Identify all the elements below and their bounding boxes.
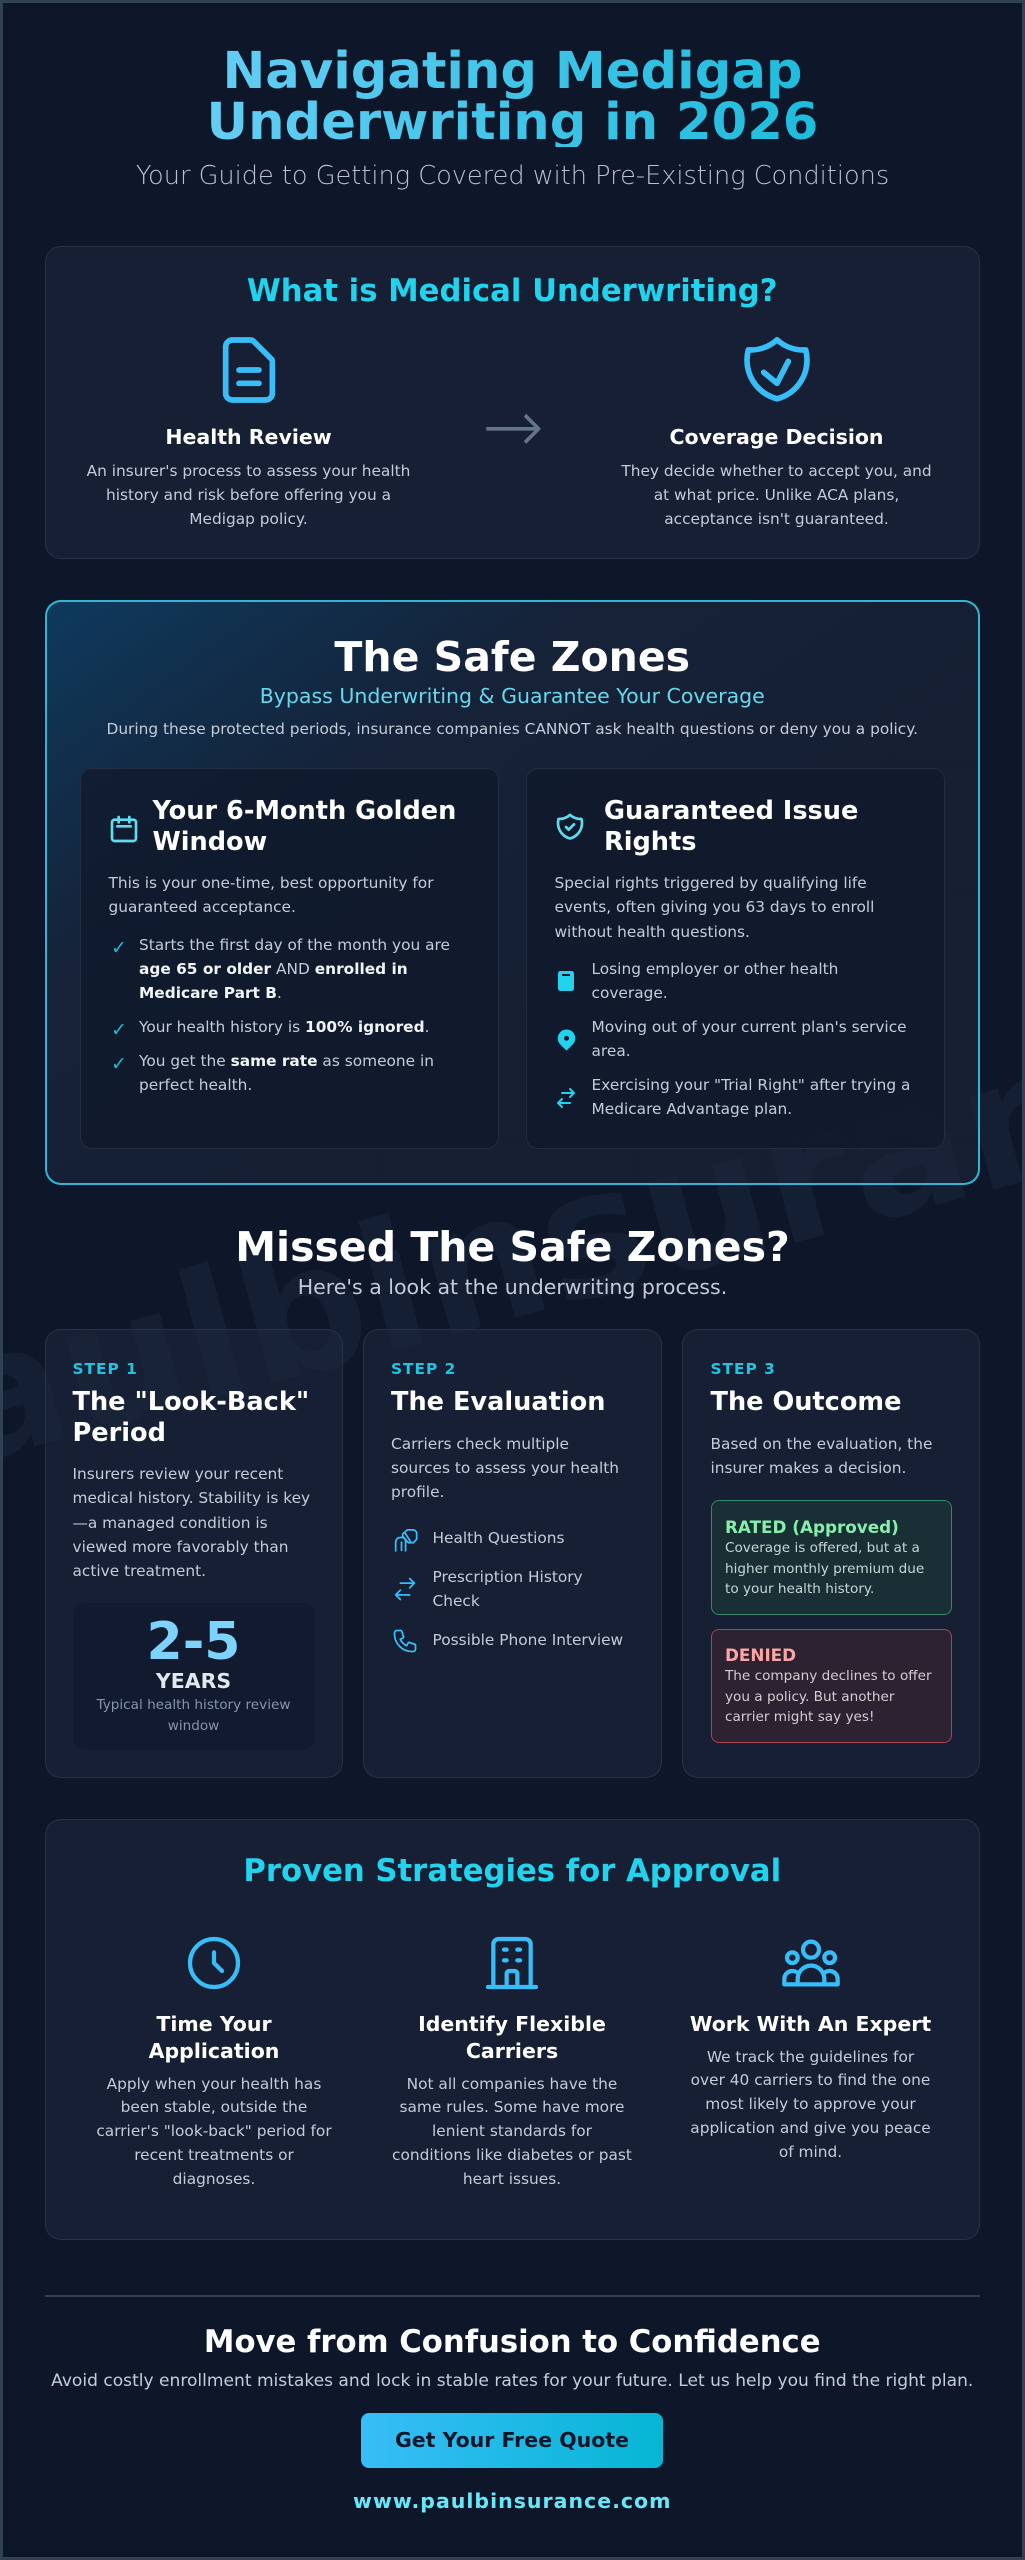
list item: area. bbox=[592, 1042, 631, 1060]
icon: building bbox=[486, 1936, 538, 1990]
text: viewed more favorably than bbox=[72, 1538, 289, 1556]
text: They decide whether to accept you, and bbox=[621, 462, 932, 480]
callout text: you a policy. But another bbox=[725, 1689, 894, 1705]
stat caption bbox=[96, 1697, 290, 1734]
list item: Moving out of your current plan's service bbox=[592, 1018, 907, 1036]
stat caption: window bbox=[168, 1718, 219, 1734]
heading: The Safe Zones bbox=[334, 633, 690, 681]
callout text: The company declines to offer bbox=[725, 1668, 932, 1684]
button bbox=[361, 2413, 663, 2468]
callout text: carrier might say yes! bbox=[725, 1709, 874, 1725]
callout text: higher monthly premium due bbox=[725, 1561, 924, 1577]
callout title: RATED (Approved) bbox=[725, 1517, 899, 1537]
list item 3 bbox=[139, 1052, 434, 1094]
text: same rules. Some have more bbox=[399, 2098, 625, 2116]
icon: card bbox=[558, 971, 574, 991]
list item: Medicare Advantage plan. bbox=[592, 1100, 792, 1118]
callout text bbox=[725, 1540, 924, 1597]
step label: STEP 2 bbox=[391, 1360, 456, 1378]
list item 3: You get the same rate as someone in bbox=[139, 1052, 434, 1070]
heading: The Outcome bbox=[710, 1387, 901, 1417]
note: During these protected periods, insurance companies CANNOT ask health questions or deny you a policy. bbox=[106, 720, 918, 738]
text: Insurers review your recent bbox=[72, 1465, 283, 1483]
heading: Identify Flexible bbox=[418, 2012, 606, 2036]
heading: The "Look-Back" bbox=[72, 1387, 309, 1417]
list item: Check bbox=[432, 1592, 480, 1610]
icon: people bbox=[778, 1931, 842, 1995]
heading bbox=[72, 1387, 309, 1448]
text: been stable, outside the bbox=[121, 2098, 307, 2116]
text bbox=[96, 2074, 332, 2188]
icon: clock bbox=[188, 1936, 240, 1990]
heading: Work With An Expert bbox=[690, 2012, 931, 2036]
heading: health review: Health Review bbox=[165, 425, 332, 449]
text: An insurer's process to assess your health bbox=[87, 462, 410, 480]
card: step 2 bbox=[363, 1329, 662, 1778]
text: We track the guidelines for bbox=[707, 2048, 914, 2066]
check 1: ✓ bbox=[111, 937, 127, 959]
text bbox=[392, 2074, 632, 2188]
list item 2: Your health history is 100% ignored. bbox=[139, 1018, 429, 1036]
text: Not all companies have the bbox=[407, 2074, 617, 2092]
text: —a managed condition is bbox=[72, 1514, 268, 1532]
text: medical history. Stability is key bbox=[72, 1489, 310, 1507]
list item: Prescription History bbox=[432, 1568, 583, 1586]
text: sources to assess your health bbox=[391, 1459, 619, 1477]
heading bbox=[148, 2012, 279, 2062]
text: lenient standards for bbox=[432, 2122, 592, 2140]
heading: Proven Strategies for Approval bbox=[243, 1854, 781, 1888]
text: acceptance isn't guaranteed. bbox=[664, 510, 889, 528]
heading: Application bbox=[149, 2038, 279, 2062]
list item 1: Medicare Part B. bbox=[139, 984, 282, 1002]
heading: Guaranteed Issue bbox=[604, 796, 858, 826]
panel: proven strategies bbox=[44, 1819, 980, 2240]
heading bbox=[604, 796, 858, 857]
column: identify flexible carriers bbox=[392, 1936, 632, 2188]
stat box bbox=[72, 1603, 314, 1750]
column: time your application bbox=[96, 1936, 332, 2188]
text: This is your one-time, best opportunity for bbox=[108, 874, 434, 892]
icon: document bbox=[222, 337, 276, 403]
text bbox=[391, 1435, 619, 1501]
stat unit: YEARS bbox=[156, 1669, 231, 1693]
icon: shield bbox=[556, 814, 584, 840]
text: of mind. bbox=[779, 2143, 842, 2161]
heading: The Evaluation bbox=[391, 1387, 605, 1417]
text bbox=[621, 462, 932, 528]
subheading: Here's a look at the underwriting process. bbox=[298, 1275, 727, 1299]
card: step 1 bbox=[44, 1329, 342, 1778]
icon: swap bbox=[394, 1578, 416, 1600]
list item bbox=[592, 960, 838, 1002]
step label: STEP 3 bbox=[710, 1360, 776, 1378]
text: active treatment. bbox=[72, 1562, 206, 1580]
text: carrier's "look-back" period for bbox=[96, 2122, 332, 2140]
text: events, often giving you 63 days to enroll bbox=[554, 898, 874, 916]
heading: Move from Confusion to Confidence bbox=[204, 2324, 821, 2360]
website link: www.paulbinsurance.com bbox=[353, 2489, 672, 2513]
list item 3: perfect health. bbox=[139, 1076, 252, 1094]
panel: the safe zones bbox=[44, 600, 980, 1185]
column: health review bbox=[86, 337, 410, 528]
text bbox=[676, 2046, 946, 2164]
heading: Period bbox=[72, 1418, 166, 1448]
list item bbox=[592, 1076, 910, 1118]
text bbox=[72, 1465, 310, 1580]
list item: Losing employer or other health bbox=[592, 960, 838, 978]
heading: Window bbox=[152, 827, 267, 857]
text: Special rights triggered by qualifying life bbox=[554, 874, 867, 892]
icon: questions bbox=[394, 1529, 418, 1552]
text: Based on the evaluation, the bbox=[710, 1435, 932, 1453]
text: guaranteed acceptance. bbox=[108, 898, 296, 916]
callout text: to your health history. bbox=[725, 1581, 874, 1597]
footer call to action bbox=[44, 2295, 980, 2520]
arrow: → bbox=[482, 384, 544, 470]
button: Get Your Free Quote bbox=[395, 2428, 629, 2452]
check 2: ✓ bbox=[111, 1019, 127, 1041]
heading: What is Medical Underwriting? bbox=[247, 274, 778, 309]
title bbox=[0, 46, 1025, 147]
callout title: DENIED bbox=[725, 1645, 796, 1665]
card: guaranteed issue bbox=[526, 768, 945, 1149]
callout text: Coverage is offered, but at a bbox=[725, 1540, 920, 1556]
text bbox=[710, 1435, 932, 1477]
stat number: 2-5 bbox=[147, 1612, 240, 1672]
text: heart issues. bbox=[463, 2170, 561, 2188]
text: diagnoses. bbox=[173, 2170, 255, 2188]
icon: phone bbox=[394, 1630, 416, 1652]
list item: Exercising your "Trial Right" after trying a bbox=[592, 1076, 910, 1094]
text: Medigap policy. bbox=[189, 510, 308, 528]
icon: pin bbox=[558, 1030, 576, 1050]
list item bbox=[432, 1568, 583, 1610]
heading: Time Your bbox=[156, 2012, 272, 2036]
text: most likely to approve your bbox=[705, 2095, 916, 2113]
callout: rated bbox=[710, 1500, 952, 1615]
heading: Your 6-Month Golden bbox=[152, 796, 456, 826]
heading: Carriers bbox=[466, 2038, 558, 2062]
text: history and risk before offering you a bbox=[106, 486, 391, 504]
icon: shield check bbox=[744, 336, 810, 402]
text: at what price. Unlike ACA plans, bbox=[654, 486, 899, 504]
list item bbox=[592, 1018, 907, 1060]
text: recent treatments or bbox=[134, 2146, 294, 2164]
subtitle: Your Guide to Getting Covered with Pre-Existing Conditions bbox=[136, 161, 889, 191]
card: step 3 bbox=[682, 1329, 980, 1778]
heading: coverage decision: Coverage Decision bbox=[669, 425, 884, 449]
panel: what is medical underwriting bbox=[44, 246, 980, 559]
text: without health questions. bbox=[554, 923, 750, 941]
heading: missed the safe zones: Missed The Safe Zones? bbox=[235, 1223, 790, 1271]
heading: Rights bbox=[604, 827, 696, 857]
icon: swap bbox=[557, 1088, 575, 1108]
text bbox=[108, 874, 434, 916]
list item 1: Starts the first day of the month you are bbox=[139, 936, 450, 954]
callout text bbox=[724, 1668, 932, 1725]
text bbox=[86, 462, 410, 528]
list item: coverage. bbox=[592, 984, 668, 1002]
text: over 40 carriers to find the one bbox=[691, 2071, 930, 2089]
text: conditions like diabetes or past bbox=[392, 2146, 632, 2164]
text bbox=[554, 874, 874, 941]
list item: Health Questions bbox=[432, 1528, 565, 1546]
list item 1: age 65 or older AND enrolled in bbox=[139, 960, 408, 978]
icon: calendar bbox=[110, 816, 138, 842]
text: Avoid costly enrollment mistakes and lock in stable rates for your future. Let us help you find the right plan. bbox=[51, 2371, 973, 2391]
title: Underwriting in 2026 bbox=[207, 92, 818, 152]
callout: denied bbox=[710, 1629, 952, 1743]
column: work with an expert bbox=[676, 1931, 946, 2164]
text: Apply when your health has bbox=[107, 2074, 321, 2092]
text: insurer makes a decision. bbox=[710, 1459, 906, 1477]
step label: STEP 1 bbox=[72, 1360, 138, 1378]
subheading: Bypass Underwriting & Guarantee Your Coverage bbox=[260, 684, 765, 708]
text: Carriers check multiple bbox=[391, 1435, 569, 1453]
card: golden window bbox=[80, 768, 499, 1149]
list item: Possible Phone Interview bbox=[432, 1631, 623, 1649]
list item 1 bbox=[139, 936, 450, 1002]
text: application and give you peace bbox=[690, 2119, 931, 2137]
title: Navigating Medigap bbox=[222, 41, 803, 101]
heading bbox=[152, 796, 456, 857]
column: coverage decision bbox=[621, 336, 932, 528]
stat caption: Typical health history review bbox=[97, 1697, 290, 1713]
text: profile. bbox=[391, 1483, 444, 1501]
heading bbox=[418, 2012, 606, 2062]
check 3: ✓ bbox=[111, 1053, 127, 1075]
